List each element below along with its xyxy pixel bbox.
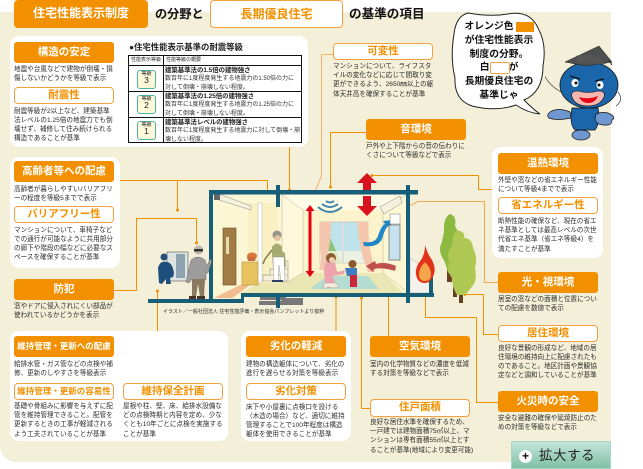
heading: 劣化対策: 劣化対策 xyxy=(275,385,317,397)
heading: 居住環境 xyxy=(498,325,598,342)
heading: 光・視環境: 光・視環境 xyxy=(522,276,574,288)
heading: 温熱環境: 温熱環境 xyxy=(527,157,569,169)
section: air environment xyxy=(370,336,470,377)
panel: thermal environment xyxy=(492,147,603,258)
heading: 維持保全計画 xyxy=(123,383,223,400)
text: residential: 定などと調和していることが基準 xyxy=(498,372,597,379)
text: maintenance plan: ことが基準 xyxy=(123,431,156,438)
title: orange label xyxy=(14,0,148,28)
bubble text: オレンジ色 xyxy=(464,21,513,32)
text: maintenance: 給排水管・ガス管などの点検や補 xyxy=(14,360,113,368)
text: air xyxy=(370,360,469,377)
heading: 構造の安定: 構造の安定 xyxy=(38,46,90,58)
badge: grade 3: 3 xyxy=(144,74,149,84)
text: barrier free: での通行が可能なように共用部分 xyxy=(14,236,113,243)
text: elderly: ーの程度を等級5までで表示 xyxy=(14,195,97,202)
text: energy saving: 満たすことが基準 xyxy=(498,246,551,253)
row text: grade 1: 数百年に1度程度発生する地震力に対して倒壊・崩 xyxy=(165,128,300,134)
bubble text: 基準じゃ xyxy=(479,90,519,101)
badge: grade 2: 2 xyxy=(144,100,149,110)
text: thermal: について等級4までで表示 xyxy=(498,186,574,193)
badge: grade 1: 等級 xyxy=(141,122,152,128)
heading: 音環境: 音環境 xyxy=(400,123,432,135)
row: grade 3 xyxy=(129,66,301,92)
title: orange label: 住宅性能表示制度 xyxy=(33,6,129,20)
text: adaptability: マンションについて、ライフスタ xyxy=(333,63,431,70)
row text: grade 2: 建築基準法の1.25倍の建物強さ xyxy=(165,93,254,100)
text: floor area xyxy=(370,418,473,454)
text: fire safety: めの対策を等級などで表示 xyxy=(498,424,577,431)
section: light and visual environment xyxy=(498,272,598,312)
text: energy saving: 断熱性能の確保など、現在の省エ xyxy=(498,218,597,225)
text: deterioration: 建物の構造躯体について、劣化の xyxy=(246,360,344,368)
row text: grade 2: 数百年に1度程度発生する地震力の1.25倍の力に xyxy=(165,102,294,108)
heading: 火災時の安全: 火災時の安全 xyxy=(516,395,580,407)
text: residential: 良好な景観の形成など、地域の居 xyxy=(498,344,597,352)
table column divider xyxy=(163,56,164,142)
icon: plus: + xyxy=(522,449,529,463)
text: sound: くさについて等級などで表示 xyxy=(366,152,451,159)
badge: grade 3 xyxy=(137,70,156,88)
heading: 温熱環境 xyxy=(498,153,598,174)
heading: 住戸面積 xyxy=(370,399,470,416)
heading: 耐震性: 耐震性 xyxy=(48,89,80,101)
text: deterioration measures xyxy=(246,403,345,438)
text: residential: 住環境の維持向上に配慮されたも xyxy=(498,354,597,361)
badge: grade 1: 1 xyxy=(144,126,149,136)
section: floor area xyxy=(370,399,473,454)
text: crime prevention: 窓やドアに侵入されにくい部品が xyxy=(14,303,113,310)
row text: grade 1: 建築基準法レベルの建物強さ xyxy=(165,119,248,126)
text: crime prevention xyxy=(14,302,113,319)
title bar xyxy=(14,0,425,28)
credit text: イラスト／一般社団法人 住宅性能評価・表示協会パンフレットより抜粋 xyxy=(163,309,324,315)
title: trailing text: の基準の項目 xyxy=(349,7,425,21)
row text: grade 3: 数百年に1度程度発生する地震力の1.50倍の力に xyxy=(165,76,294,82)
heading: 住戸面積: 住戸面積 xyxy=(399,401,441,413)
text: air: する対策を等級などで表示 xyxy=(370,370,449,377)
text: maintenance plan: くとも10年ごとに点検を実施する xyxy=(123,421,223,428)
leader dots xyxy=(156,174,466,300)
row text: grade 1: 壊しない程度。 xyxy=(165,137,207,143)
text: adaptability: イルの変化などに応じて間取り変 xyxy=(333,72,432,79)
heading: 維持管理・更新への配慮: 維持管理・更新への配慮 xyxy=(17,341,111,351)
text: adaptability: 更ができるよう、2650㎜以上の躯 xyxy=(333,81,433,88)
heading: 維持管理・更新の容易性: 維持管理・更新の容易性 xyxy=(17,386,111,396)
button: enlarge xyxy=(511,441,611,469)
text: thermal xyxy=(498,176,597,193)
text: barrier free xyxy=(14,226,113,261)
text: maintenance plan: 屋根や柱、壁、床、給排水設備な xyxy=(123,403,222,410)
heading: 劣化の軽減: 劣化の軽減 xyxy=(270,340,322,352)
icon: plus xyxy=(519,450,532,463)
heading: 省エネルギー性: 省エネルギー性 xyxy=(511,199,585,211)
text: maintenance plan xyxy=(123,402,223,438)
heading: 高齢者等への配慮: 高齢者等への配慮 xyxy=(22,165,106,177)
table header xyxy=(129,56,301,66)
row text: grade 2: 対して倒壊・崩壊しない程度。 xyxy=(165,111,249,117)
text: floor area: 一戸建では建物面積75㎡以上、マ xyxy=(370,428,470,435)
text: floor area: 良好な居住水準を確保するため、 xyxy=(370,419,469,426)
heading: 光・視環境 xyxy=(498,272,598,293)
heading: 可変性: 可変性 xyxy=(367,45,399,57)
heading: 維持管理・更新の容易性 xyxy=(14,383,114,400)
text: elderly: 高齢者が暮らしやすいバリアフリ xyxy=(14,186,113,193)
text: ease of maintenance xyxy=(14,402,113,438)
text: light xyxy=(498,295,597,312)
text: deterioration measures: 躯体を使用できることが基準 xyxy=(246,431,332,438)
panel: structural stability xyxy=(10,36,308,147)
text: thermal: 外壁や窓などの省エネルギー性能 xyxy=(498,177,597,184)
text: adaptability xyxy=(333,62,433,98)
text: sound: 戸外や上下階からの音の伝わりに xyxy=(366,143,465,150)
panel: maintenance xyxy=(10,331,228,441)
text: maintenance: 修、更新のしやすさを等級表示 xyxy=(14,370,106,377)
text: deterioration: 進行を遅らせる対策を等級表示 xyxy=(246,370,338,377)
heading: 居住環境: 居住環境 xyxy=(527,327,569,339)
text: fire safety: 安全な避難の確保や延焼防止のた xyxy=(498,414,597,422)
badge: grade 2 xyxy=(137,95,156,114)
text: maintenance xyxy=(14,360,113,377)
title: white label xyxy=(210,0,343,28)
speech bubble xyxy=(452,12,545,114)
text: energy saving: ネ基準としては最高レベルの次世 xyxy=(498,227,597,234)
badge: grade 3: 等級 xyxy=(141,70,152,76)
title: white label: 長期優良住宅 xyxy=(240,7,312,21)
person: burglar and inspector xyxy=(158,246,212,299)
icon: mascot with graduation cap xyxy=(545,46,621,140)
heading: 維持管理・更新への配慮 xyxy=(14,336,114,357)
text: residential xyxy=(498,344,597,379)
text: energy saving: 代省エネ基準（省エネ等級4）を xyxy=(498,236,594,243)
heading: 空気環境: 空気環境 xyxy=(399,340,441,352)
text: ease of maintenance: よう工夫されていることが基準 xyxy=(14,431,106,438)
heading: 維持保全計画: 維持保全計画 xyxy=(142,385,204,397)
heading: バリアフリー性 xyxy=(14,206,114,223)
text: structure xyxy=(14,65,113,82)
section: residential environment xyxy=(498,325,598,379)
text: seismic: 壊せず、補修して住み続けられる xyxy=(14,126,112,133)
text: ease of maintenance: 更新するときの工事が軽減される xyxy=(14,421,113,428)
heading: 防犯: 防犯 xyxy=(54,283,74,295)
text: structure: 地震や台風などで建物が倒壊・損 xyxy=(14,66,113,73)
heading: バリアフリー性: バリアフリー性 xyxy=(27,208,101,220)
text: seismic: 法レベルの1.25倍の地震力でも倒 xyxy=(14,117,113,124)
text: barrier free: の廊下や階段の幅などに必要なス xyxy=(14,245,113,252)
heading: seismic grade table: ●住宅性能表示基準の耐震等級 xyxy=(129,42,243,52)
text: light: ての配慮を数値で表示 xyxy=(498,305,564,312)
text: ease of maintenance: 管を維持管理できること。配管を xyxy=(14,412,113,419)
badge: grade 1 xyxy=(137,121,156,140)
bubble text: が住宅性能表示 xyxy=(465,35,533,46)
section: adaptability xyxy=(333,43,433,98)
text: air: 室内の化学物質などの濃度を低減 xyxy=(370,360,469,368)
table: seismic grades xyxy=(128,55,302,143)
text: elderly xyxy=(14,185,113,202)
table header: 性能等級の概要 xyxy=(166,57,201,63)
text: barrier free: ペースを確保することが基準 xyxy=(14,254,99,261)
heading: 音環境 xyxy=(366,119,466,140)
text: seismic: 構造であることが基準 xyxy=(14,135,80,142)
text: light: 居室の窓などの面積と位置につい xyxy=(498,296,597,303)
text: fire safety xyxy=(498,414,597,431)
section: fire safety xyxy=(498,391,598,431)
bubble text: 長期優良住宅の xyxy=(465,76,533,87)
bubble shape xyxy=(452,12,545,114)
text: maintenance plan: どの点検時期と内容を定め、少な xyxy=(123,412,222,419)
text: deterioration measures: （木造の場合）など、適切に維持 xyxy=(246,413,345,420)
text: deterioration measures: 床下や小屋裏に点検口を設ける xyxy=(246,404,338,410)
text: deterioration xyxy=(246,360,344,377)
text: sound xyxy=(366,142,465,159)
text: ease of maintenance: 基礎や骨組みに影響を与えずに配 xyxy=(14,403,113,410)
row text: grade 1 xyxy=(165,118,300,143)
text: floor area: ることが基準(地域により変更可能) xyxy=(370,447,473,454)
heading: 省エネルギー性 xyxy=(498,197,598,214)
row: grade 1 xyxy=(137,118,300,143)
text: deterioration measures: 管理することで100年程度は構造 xyxy=(246,422,343,429)
text: floor area: ンションは専有面積55㎡以上とす xyxy=(370,437,469,444)
text: residential: のであること。地区計画や景観協 xyxy=(498,363,597,370)
table header: 性能表示等級 xyxy=(131,57,161,63)
row text: grade 3: 建築基準法の1.5倍の建物強さ xyxy=(165,67,251,74)
trees xyxy=(440,214,476,303)
bubble text: 制度の分野。 xyxy=(470,49,528,60)
badge: grade 2: 等級 xyxy=(141,96,152,102)
text: seismic xyxy=(14,107,113,142)
heading: 空気環境 xyxy=(370,336,470,357)
row text: grade 2 xyxy=(165,92,294,117)
text: adaptability: 体天井高を確保することが基準 xyxy=(333,91,425,98)
text: energy saving xyxy=(498,217,597,253)
heading: 可変性 xyxy=(333,43,433,60)
fire xyxy=(416,245,435,283)
title: connecting text: の分野と xyxy=(155,7,204,21)
bubble text: 白 が xyxy=(480,62,518,73)
leader lines xyxy=(114,54,498,408)
heading: 耐震性 xyxy=(14,87,114,104)
heading: 構造の安定 xyxy=(14,42,114,63)
bubble text xyxy=(464,20,533,101)
panel: reducing deterioration xyxy=(241,331,351,441)
row text: grade 3 xyxy=(165,66,294,91)
heading: 劣化対策 xyxy=(246,383,346,400)
text: crime prevention: 使われているかどうかを表示 xyxy=(14,312,99,319)
text: barrier free: マンションについて、車椅子など xyxy=(14,226,112,234)
white swatch xyxy=(490,62,510,74)
text: seismic: 耐震等級が2以上など、建築基準 xyxy=(14,108,110,114)
heading: 防犯 xyxy=(14,279,114,300)
heading: 高齢者等への配慮 xyxy=(14,161,114,182)
heading: 火災時の安全 xyxy=(498,391,598,412)
text: structure: 傷しないかどうかを等級で表示 xyxy=(14,75,106,82)
row: grade 2 xyxy=(129,92,301,118)
house xyxy=(148,173,434,308)
orange swatch xyxy=(516,22,534,32)
section: crime prevention xyxy=(14,279,114,319)
section: sound environment xyxy=(366,119,466,159)
heading: 劣化の軽減 xyxy=(246,336,346,357)
row text: grade 3: 対して倒壊・崩壊しない程度。 xyxy=(165,85,249,91)
panel: consideration for the elderly xyxy=(10,157,120,268)
button label: 拡大する xyxy=(539,448,595,463)
